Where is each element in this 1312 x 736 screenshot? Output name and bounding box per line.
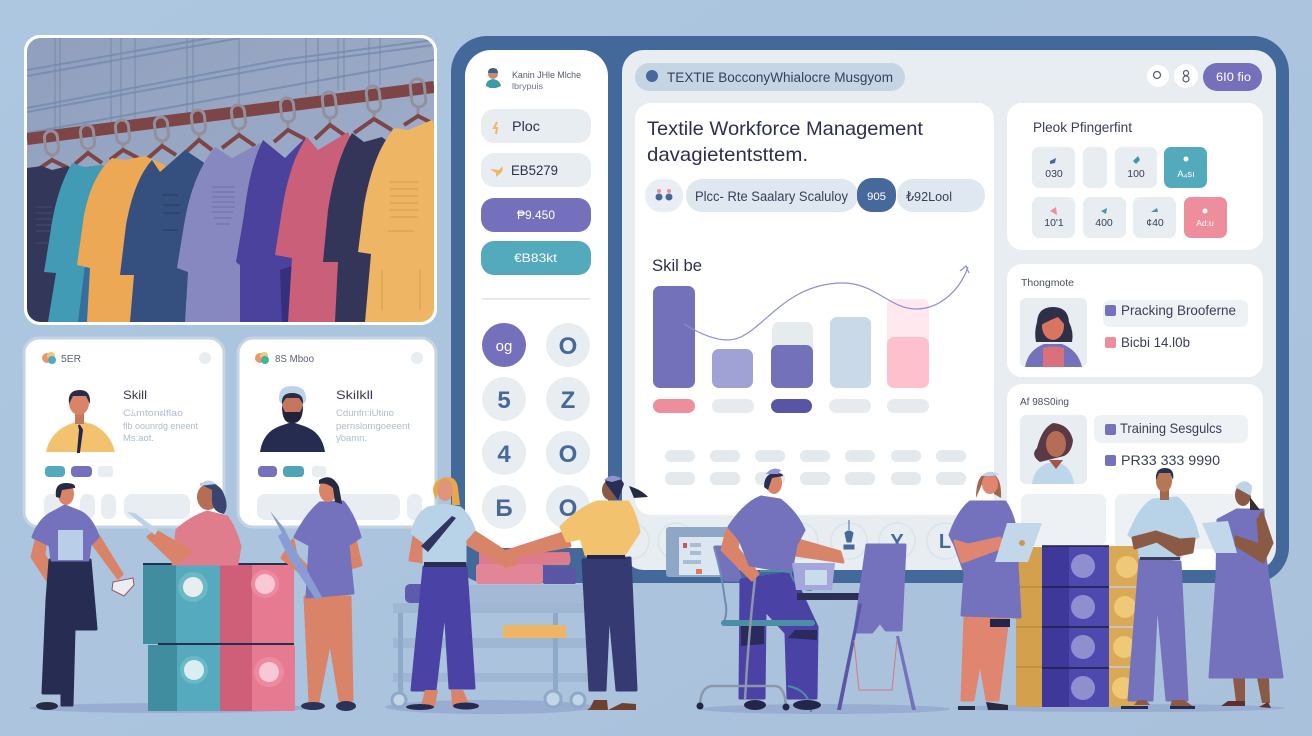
garment: navy: [27, 166, 70, 322]
card 2 description: [336, 408, 411, 443]
avatar: woman with dark hair: [1025, 307, 1082, 367]
tile grid: Ad:u: [1196, 218, 1214, 228]
main panel: [635, 103, 994, 515]
card: profile Thongmote: [1007, 264, 1263, 377]
user name: Kanin JHle Mlche: [512, 70, 581, 80]
placeholder pill grid: [665, 450, 966, 485]
profile card 2: [238, 338, 436, 527]
card: piece fingerprint: Pleok Pfingerfint: [1033, 119, 1132, 135]
number circles: O: [559, 441, 577, 468]
card 1 footer blocks: [44, 494, 190, 519]
purple chair: [837, 545, 916, 710]
avatar: bearded man: [260, 386, 325, 452]
number circles: Z: [561, 387, 575, 414]
button: teal: [481, 241, 591, 275]
worker: woman with tablet: [950, 472, 1042, 710]
worker: woman in pink top: [127, 480, 240, 564]
worker: woman in purple top: [270, 477, 361, 711]
card: piece fingerprint: [1007, 103, 1263, 250]
bottom icon strip: Y: [890, 531, 904, 553]
icon: user avatar: [486, 68, 501, 88]
card 2 footer blocks: [257, 494, 422, 520]
number circles: [482, 323, 590, 529]
worker: man in light shirt: [1121, 468, 1198, 709]
button: EB5279: EB5279: [511, 162, 558, 178]
chair back and stool frame: [715, 547, 741, 580]
worker: man with apron: [32, 483, 134, 710]
garment: purple: [236, 138, 306, 322]
chart heading: Skil be: [652, 257, 702, 275]
card 1 description: Ms:aot.: [123, 433, 154, 443]
avatar: man in yellow shirt: [46, 390, 115, 452]
garment: teal: [44, 163, 104, 322]
card: training: Af 98S0ing: [1020, 397, 1069, 408]
header pill: [635, 63, 905, 91]
stacked pink cloth: [476, 552, 576, 584]
button: purple: ₱9.450: [517, 208, 555, 222]
main title: davagietentsttem.: [647, 144, 808, 166]
server stacks: [1016, 546, 1141, 707]
worker: woman in dress: [1202, 481, 1282, 708]
card 1 tags: [45, 466, 113, 477]
pink and teal crates: [143, 563, 295, 711]
tile grid: A₄sı: [1177, 169, 1195, 180]
card 1 heading: Skill: [123, 388, 147, 402]
stack: gold right: [1109, 546, 1141, 707]
bar chart: [653, 286, 929, 413]
list row: Training: Training Sesgulcs: [1120, 420, 1222, 436]
list row: Pracking Brooferne: Pracking Brooferne: [1121, 302, 1236, 318]
card 1 description: flb oounrdg eneent: [123, 421, 198, 431]
faint image placeholders: [1021, 494, 1240, 549]
bottom icon strip: L: [939, 531, 951, 553]
number circles: og: [496, 338, 512, 355]
worker: blonde woman: [406, 477, 516, 710]
garment: dark navy: [323, 133, 386, 322]
main title: [647, 118, 924, 166]
icon: colourful logo: [42, 352, 56, 364]
profile card 1: [24, 338, 224, 527]
machine control panel: [666, 527, 729, 577]
pill row: Plcc- Rte Saalary Scaluloy: [695, 189, 848, 204]
garment: slate blue: [120, 150, 204, 322]
garment: orange: [77, 156, 165, 322]
number circles: 4: [497, 441, 511, 468]
list row: Training: [1094, 415, 1248, 443]
stack: gold left: [1016, 547, 1043, 707]
card 1 label: 5ER: [61, 354, 81, 365]
bottom icon strip: [613, 520, 963, 559]
photo panel: garments on rail: [24, 35, 437, 325]
sidebar panel: [465, 50, 608, 548]
crate: teal bottom: [148, 645, 220, 711]
garment: yellow: [358, 120, 434, 322]
tile grid: ¢40: [1146, 217, 1164, 229]
tile grid: 030: [1045, 168, 1063, 180]
material trolley: [392, 552, 590, 707]
card 2 description: Cdunfn:iUtino: [336, 408, 394, 418]
laptop and desk: [792, 563, 859, 600]
list row: Bicbi: Bicbi 14.l0b: [1121, 334, 1190, 350]
pill row: ₺92Lool: [906, 189, 952, 204]
header buttons: 6I0 fio: [1216, 72, 1251, 84]
tile grid: 100: [1127, 168, 1145, 180]
card 2 label: 8S Mboo: [275, 354, 314, 365]
crate: pink top right: [220, 563, 294, 644]
button: teal: €B83kt: [514, 251, 558, 265]
floor shadows: [30, 700, 1285, 714]
crate: pink bottom right: [158, 643, 295, 711]
card 2 heading: Skilkll: [336, 388, 373, 402]
list row: Pracking Brooferne: [1103, 300, 1248, 327]
list row: PR number: PR33 333 9990: [1121, 452, 1220, 468]
header pill: TEXTIE BocconyWhialocre Musgyom: [667, 70, 893, 85]
tile grid: 400: [1095, 217, 1113, 229]
card 2 tags: [258, 466, 326, 477]
trend arrow: [684, 266, 969, 340]
folded yellow fabric: [503, 625, 566, 638]
main title: Textile Workforce Management: [647, 118, 924, 140]
card 2 description: pernslomgoeeent: [336, 421, 411, 431]
button: Ploc: [481, 109, 591, 143]
icon: colourful logo 2: [255, 352, 269, 364]
number circles: 5: [497, 387, 511, 414]
number circles: O: [559, 495, 577, 522]
button: purple: [481, 198, 591, 232]
hangers: [44, 78, 426, 160]
card: profile Thongmote: Thongmote: [1021, 278, 1074, 289]
number circles: O: [559, 333, 577, 360]
worker: man in yellow shirt: [504, 476, 648, 710]
garment: pink: [275, 132, 350, 322]
avatar: woman in blue shirt: [1032, 423, 1074, 484]
card: training: [1007, 384, 1263, 570]
button: Ploc: Ploc: [512, 118, 540, 134]
dashboard monitor: [451, 36, 1289, 583]
clothes rail: [27, 87, 434, 139]
tile grid: [1032, 147, 1227, 238]
number circles: Б: [495, 495, 513, 522]
worker: seated man with chair: [696, 469, 843, 712]
card 1 description: Cﾑmtonฝflao: [123, 408, 183, 418]
tile grid: 10'1: [1044, 217, 1064, 229]
pill row: [645, 178, 985, 212]
card 2 description: ƴoamn.: [336, 433, 367, 443]
card 1 description: [123, 408, 198, 443]
header buttons: [1147, 63, 1262, 91]
pill row: 905: [867, 191, 886, 203]
garment: lavender: [177, 143, 261, 322]
stack: blue: [1042, 546, 1109, 707]
user subtitle: lbrypuis: [512, 82, 543, 91]
button: EB5279: [481, 153, 591, 187]
crate: teal top: [143, 563, 220, 644]
